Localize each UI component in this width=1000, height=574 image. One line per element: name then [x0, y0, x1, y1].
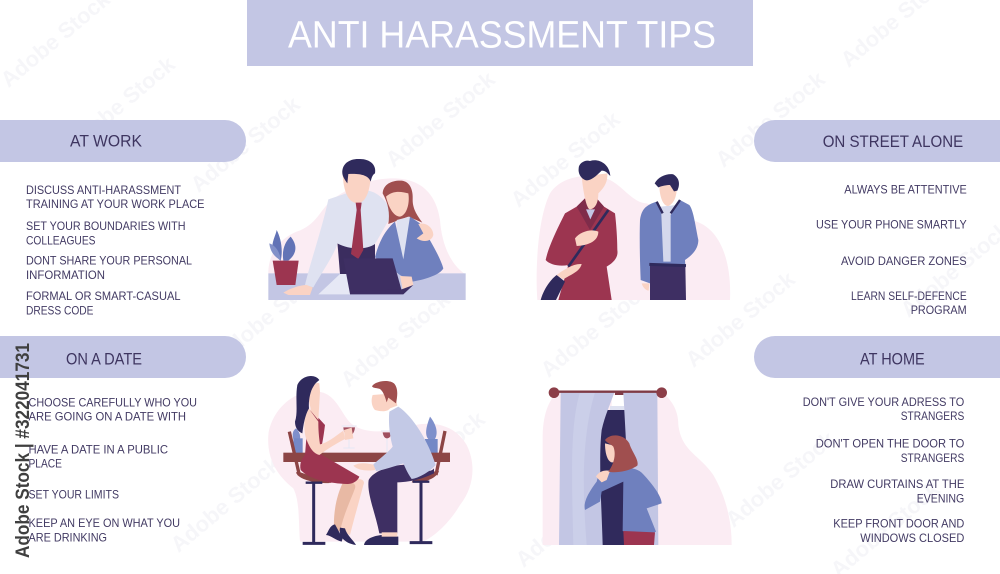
tips: at work: COLLEAGUES — [26, 233, 96, 247]
panel: at work — [0, 120, 246, 318]
tips: at work: INFORMATION — [26, 268, 105, 282]
vertical stock watermark: Adobe Stock | #322041731 — [13, 343, 34, 558]
text: Adobe Stock — [371, 406, 490, 512]
title banner — [247, 0, 753, 66]
text: Adobe Stock — [511, 466, 630, 572]
tips: at work — [26, 183, 204, 318]
illustration: street — [537, 160, 730, 300]
tips: on a date: PLACE — [28, 457, 62, 471]
illustration: date — [268, 376, 472, 545]
text: Adobe Stock — [681, 266, 800, 372]
text: Adobe Stock — [381, 66, 500, 172]
illustration: curtain — [543, 387, 732, 545]
tips: at home: EVENING — [917, 492, 964, 506]
tips: on a date: KEEP AN EYE ON WHAT YOU — [28, 516, 180, 530]
text: Adobe Stock — [506, 106, 625, 212]
heading: at home — [754, 336, 1000, 378]
tips: at work: FORMAL OR SMART-CASUAL — [26, 289, 181, 303]
tips: at home: STRANGERS — [901, 409, 964, 423]
heading: on street alone: ON STREET ALONE — [823, 132, 963, 151]
text: Adobe Stock — [211, 261, 330, 367]
tips: on a date: SET YOUR LIMITS — [28, 487, 119, 501]
text: Adobe Stock — [61, 51, 180, 157]
tips: on street alone: USE YOUR PHONE SMARTLY — [816, 218, 967, 232]
tips: on street alone: ALWAYS BE ATTENTIVE — [844, 182, 967, 196]
tips: on street alone: AVOID DANGER ZONES — [841, 254, 967, 268]
heading: on a date — [0, 336, 246, 378]
heading: on a date: ON A DATE — [66, 350, 142, 369]
tips: at work: DONT SHARE YOUR PERSONAL — [26, 254, 192, 268]
tips: at home: STRANGERS — [901, 451, 964, 465]
panel: at home — [754, 336, 1000, 545]
tips: at home: DON'T OPEN THE DOOR TO — [816, 436, 964, 450]
heading: at work: AT WORK — [70, 132, 143, 150]
illustration: office harassment — [268, 159, 466, 300]
tips: on street alone: PROGRAM — [911, 303, 967, 317]
tips: at home: KEEP FRONT DOOR AND — [833, 516, 965, 530]
tips: at work: SET YOUR BOUNDARIES WITH — [26, 219, 186, 233]
tips: at work: DISCUSS ANTI-HARASSMENT — [26, 183, 182, 197]
tips: on a date — [28, 395, 197, 545]
text: Adobe Stock — [721, 426, 840, 532]
title banner: ANTI HARASSMENT TIPS — [288, 14, 716, 56]
tips: at work: TRAINING AT YOUR WORK PLACE — [26, 197, 204, 211]
heading: at work — [0, 120, 246, 162]
tips: on street alone — [816, 182, 967, 317]
tips: at home: DON'T GIVE YOUR ADRESS TO — [803, 395, 964, 409]
tips: at work: DRESS CODE — [26, 304, 94, 318]
heading: at home: AT HOME — [860, 350, 925, 369]
tips: on a date: HAVE A DATE IN A PUBLIC — [28, 442, 168, 456]
tips: on a date: ARE DRINKING — [28, 531, 107, 545]
text: Adobe Stock — [536, 276, 655, 382]
text: Adobe Stock — [711, 66, 830, 172]
tips: at home — [803, 395, 965, 545]
text: Adobe Stock — [336, 286, 455, 392]
panel: on street alone — [754, 120, 1000, 317]
tips: at home: DRAW CURTAINS AT THE — [830, 477, 964, 491]
text: Adobe Stock — [166, 451, 285, 557]
text: Adobe Stock — [186, 91, 305, 197]
panel: on a date — [0, 336, 246, 545]
tips: on a date: ARE GOING ON A DATE WITH — [28, 410, 186, 424]
tips: on street alone: LEARN SELF-DEFENCE — [851, 289, 967, 303]
tips: on a date: CHOOSE CAREFULLY WHO YOU — [28, 395, 197, 409]
heading: on street alone — [754, 120, 1000, 162]
tips: at home: WINDOWS CLOSED — [860, 531, 965, 545]
